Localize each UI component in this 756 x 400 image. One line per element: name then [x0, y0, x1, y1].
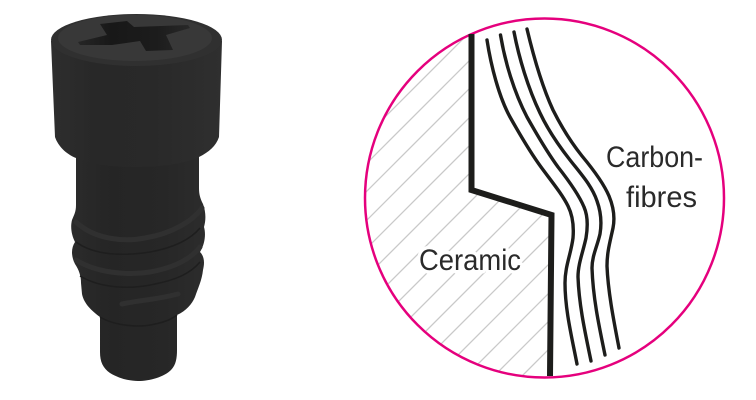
label: Carbon-fibres [606, 141, 703, 214]
label: Ceramic: Ceramic [419, 244, 521, 277]
ring grooves [76, 228, 200, 326]
ceramic hatching [366, 39, 550, 376]
screw lower body [71, 150, 205, 381]
screw head side [51, 41, 222, 167]
screw head chamfer [51, 14, 222, 66]
label: Carbon-fibres: fibres [626, 181, 697, 214]
ring highlights [76, 208, 202, 304]
detail circle [360, 10, 724, 385]
carbon fibres [487, 29, 619, 364]
screw head top face [58, 15, 212, 61]
ceramic boundary [472, 34, 552, 376]
cross slot [78, 21, 190, 51]
magenta circle outline [365, 18, 724, 378]
screw [51, 14, 222, 381]
label: Carbon-fibres: Carbon- [606, 141, 703, 174]
